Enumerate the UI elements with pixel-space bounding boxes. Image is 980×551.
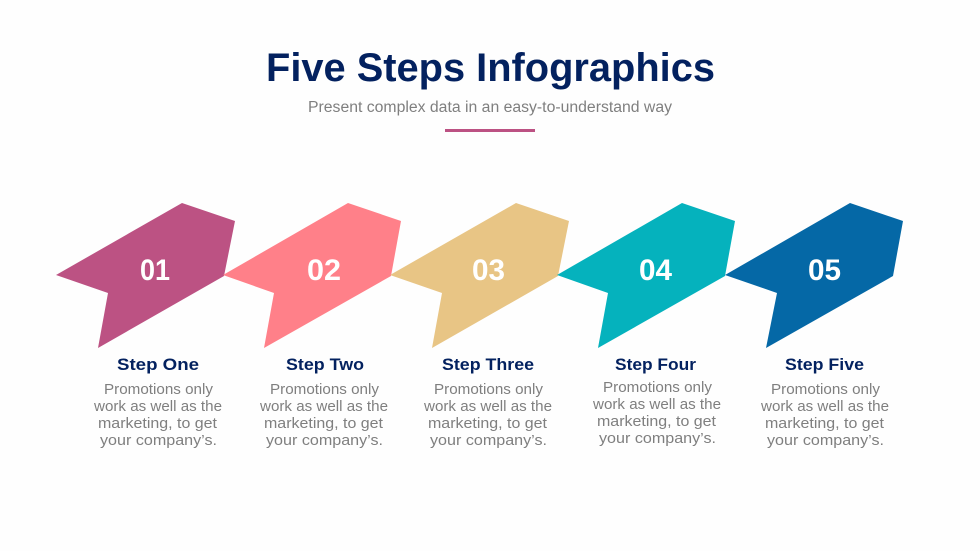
title: Five Steps Infographics	[266, 46, 715, 90]
number 02: 02	[307, 254, 341, 287]
description: Step Four: marketing, to get	[597, 414, 716, 430]
number 04: 04	[639, 254, 672, 287]
description: Step Five: work as well as the	[760, 399, 889, 415]
description: Step Three: marketing, to get	[428, 416, 547, 432]
description: Step One	[93, 382, 222, 449]
description: Step Two	[259, 382, 388, 449]
description: Step Four	[592, 380, 721, 447]
description: Step One: Promotions only	[104, 382, 214, 398]
step 2	[223, 203, 401, 449]
number 03: 03	[472, 254, 505, 287]
arrow shape 04	[557, 203, 735, 348]
heading: Step Two: Step Two	[286, 355, 364, 374]
description: Step Five: Promotions only	[771, 382, 881, 398]
description: Step Three: your company’s.	[430, 433, 547, 449]
title underline accent	[445, 129, 535, 132]
step 5	[725, 203, 903, 449]
description: Step Three: work as well as the	[423, 399, 552, 415]
description: Step Two: your company’s.	[266, 433, 383, 449]
description: Step Five: marketing, to get	[765, 416, 884, 432]
description: Step Four: Promotions only	[603, 380, 713, 396]
number 01: 01	[140, 254, 170, 287]
description: Step Five	[760, 382, 889, 449]
description: Step One: marketing, to get	[98, 416, 217, 432]
description: Step Two: Promotions only	[270, 382, 380, 398]
number 05: 05	[808, 254, 841, 287]
heading: Step One: Step One	[117, 355, 199, 374]
description: Step Four: work as well as the	[592, 397, 721, 413]
arrow shape 01	[56, 203, 235, 348]
subtitle: Present complex data in an easy-to-understand way	[308, 99, 672, 116]
description: Step Two: work as well as the	[259, 399, 388, 415]
heading: Step Three: Step Three	[442, 355, 534, 374]
step 4	[557, 203, 735, 447]
description: Step One: work as well as the	[93, 399, 222, 415]
arrow shape 02	[223, 203, 401, 348]
description: Step Three	[423, 382, 552, 449]
step 1	[56, 203, 235, 449]
description: Step Five: your company’s.	[767, 433, 884, 449]
step 3	[390, 203, 569, 449]
heading: Step Five: Step Five	[785, 355, 864, 374]
description: Step One: your company’s.	[100, 433, 217, 449]
heading: Step Four: Step Four	[615, 355, 696, 374]
description: Step Three: Promotions only	[434, 382, 544, 398]
arrow shape 03	[390, 203, 569, 348]
description: Step Two: marketing, to get	[264, 416, 383, 432]
description: Step Four: your company’s.	[599, 431, 716, 447]
arrow shape 05	[725, 203, 903, 348]
